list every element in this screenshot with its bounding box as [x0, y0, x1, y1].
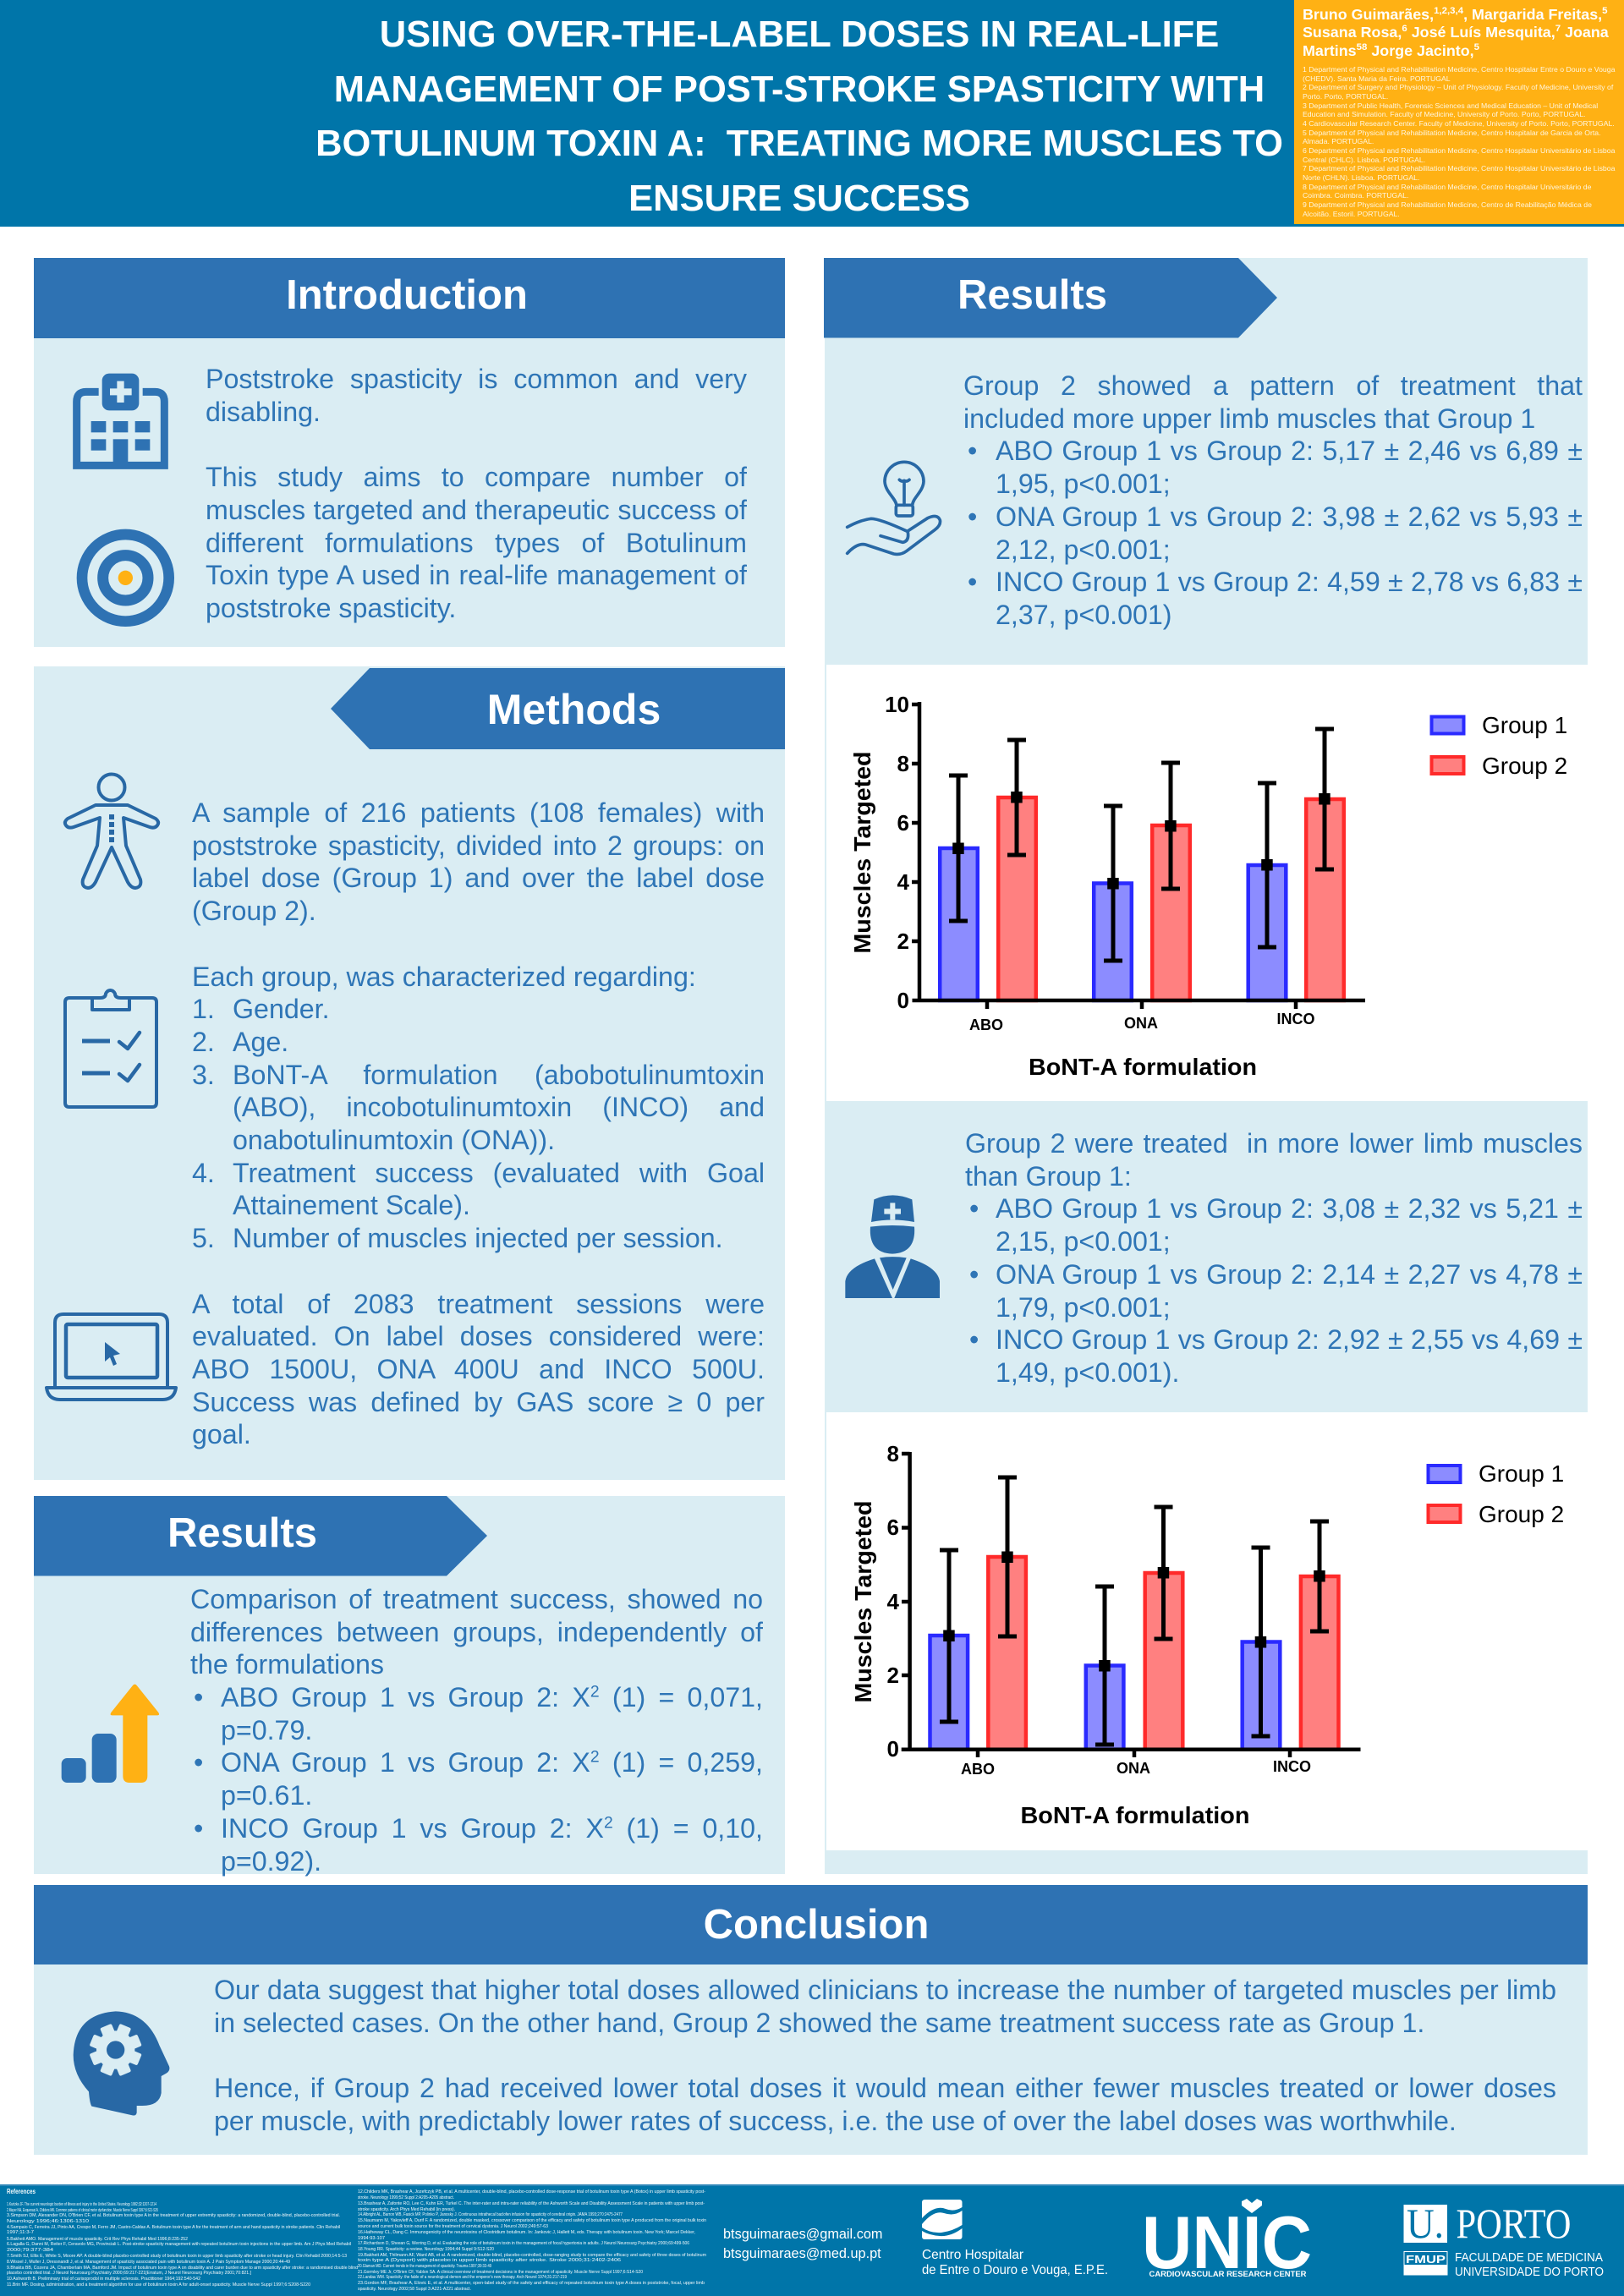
methods text: Each group, was characterized regarding:: [192, 961, 696, 991]
references: 1997;11:3-7: [7, 2230, 34, 2235]
legend: Group 2: [1479, 1501, 1564, 1527]
icon: hospital: [73, 374, 168, 469]
icon: hand with light bulb: [846, 460, 942, 556]
references: 10.Ashworth B. Preliminary trial of carisoprodol in multiple sclerosis. Practitioner 1964;192:540-542: [7, 2277, 200, 2282]
references: [7, 2188, 706, 2292]
logo: Centro Hospitalar: [922, 2200, 1108, 2277]
methods text: Gender.: [233, 994, 330, 1024]
results left text: [190, 1584, 763, 1876]
logo: U.Porto FMUP: PORTO: [1457, 2200, 1572, 2247]
references: 12.Childers MK, Brashear A, Jozefczyk PB, et al. A multicenter, double-blind, placebo-controlled dose-response trial of botulinum toxin type A (Botox) in upper limb spasticity post-: [358, 2189, 705, 2195]
methods text: A sample of 216 patients (108 females) with: [192, 797, 765, 828]
results right text: lower limb: [965, 1128, 1583, 1388]
results right text: upper limb: 2,37, p<0.001): [996, 600, 1172, 630]
results right text: lower limb: •: [969, 1324, 979, 1355]
results left text: •: [194, 1747, 203, 1778]
results right text: upper limb: 2,12, p<0.001;: [996, 534, 1171, 565]
affiliations: 3 Department of Public Health, Forensic Sciences and Medical Education – Unit of Medical: [1303, 101, 1598, 110]
introduction text: different formulations types of Botulinum: [206, 528, 747, 558]
heading: methods arrow: Methods: [487, 686, 661, 733]
results right text: lower limb: than Group 1:: [965, 1161, 1132, 1192]
references: 9.Bhakta BB, Cozens JA, Chamberlain MA, Bamford JM. Impact of botulinum toxin type A on disability and carer burden due to arm spasticity after stroke: a randomised double blind: [7, 2266, 358, 2271]
introduction text: [206, 364, 747, 623]
affiliations: 6 Department of Physical and Rehabilitation Medicine, Centro Hospitalar Universitário de Lisboa: [1303, 146, 1615, 155]
x axis labels: ABO: [969, 1016, 1003, 1033]
heading: conclusion: Conclusion: [704, 1902, 929, 1948]
results right text: lower limb: ABO Group 1 vs Group 2: 3,08 ± 2,32 vs 5,21 ±: [996, 1193, 1583, 1224]
affiliations: 4 Cardiovascular Research Center. Faculty of Medicine, University of Porto. Porto, PORTUGAL.: [1303, 119, 1615, 128]
references: stroke spasticity. Arch Phys Med Rehabil (in press).: [358, 2207, 455, 2212]
methods text: label dose (Group 1) and over the label dose: [192, 863, 765, 893]
authors: Martins58 Jorge Jacinto,5: [1303, 42, 1479, 59]
y axis labels: 6: [887, 1515, 899, 1540]
axes: [902, 1452, 1360, 1757]
heading: results left arrow: [34, 1496, 487, 1576]
affiliations: Coimbra. Coimbra. PORTUGAL.: [1303, 191, 1408, 200]
y axis labels: [887, 1441, 900, 1762]
methods text: [192, 797, 765, 1449]
icon: laptop with cursor: [45, 1312, 178, 1401]
methods text: BoNT-A formulation (abobotulinumtoxin: [233, 1060, 765, 1090]
conclusion text: per muscle, with predictably lower rates of success, i.e. the use of over the label doses was worthwhile.: [214, 2106, 1457, 2136]
panel: introduction: [34, 258, 785, 647]
references: Neurology 1996;46:1306-1310: [7, 2219, 89, 2224]
contact emails: btsguimaraes@med.up.pt: [723, 2246, 881, 2261]
x axis labels: ONA: [1124, 1015, 1158, 1032]
references: 23.Gordon MF, Brashear A, Elovic E, et al. A multicenter, open-label study of the safety and efficacy of repeated botulinum toxin type A doses in poststroke, focal, upper limb: [358, 2281, 705, 2286]
references: 22.Landau WM. Spasticity: the fable of a neurological demon and the emperor's new therapy. Arch Neurol 1974;31:217-219: [358, 2275, 567, 2280]
introduction text: Toxin type A used in real-life management of: [206, 560, 747, 590]
affiliations: Norte (CHLN). Lisboa. PORTUGAL.: [1303, 173, 1419, 182]
panel: conclusion: [34, 1885, 1588, 2155]
references: spasticity. Neurology 2002;58 Suppl 3:A221-A221 abstract.: [358, 2287, 471, 2292]
methods text: evaluated. On label doses considered were:: [192, 1321, 765, 1351]
results right text: lower limb: INCO Group 1 vs Group 2: 2,92 ± 2,55 vs 4,69 ±: [996, 1324, 1583, 1355]
references: 7.Smith SJ, Ellis E, White S, Moore AP. A double-blind placebo-controlled study of botulinum toxin in upper limb spasticity after stroke or head injury. Clin Rehabil 2000;14:5-13: [7, 2254, 347, 2259]
affiliations: (CHEDV). Santa Maria da Feira. PORTUGAL: [1303, 74, 1451, 83]
results left text: differences between groups, independently of: [190, 1617, 763, 1647]
icon: target: [76, 529, 174, 627]
references: 21.Gormley ME Jr, O'Brien CF, Yablon SA. A clinical overview of treatment decisions in the management of spasticity. Muscle Nerve Suppl 1997;6:S14-S20: [358, 2270, 643, 2275]
logo: UNIC: UNIC: [1142, 2200, 1312, 2284]
legend: Group 1: [1482, 712, 1567, 738]
results left text: the formulations: [190, 1649, 384, 1680]
affiliations: 2 Department of Surgery and Physiology – Unit of Physiology. Faculty of Medicine, University of: [1303, 83, 1613, 91]
y axis title: Muscles Targeted: [849, 751, 875, 954]
icon: head with gear: [73, 2011, 169, 2116]
affiliations: 9 Department of Physical and Rehabilitation Medicine, Centro de Reabilitação Médica de: [1303, 200, 1592, 209]
logo: U.Porto FMUP: FMUP: [1406, 2253, 1446, 2266]
references: 4.Sampaio C, Ferreira JJ, Pinto AA, Crespo M, Ferro JM, Castro-Caldas A. Botulinum toxin type A for the treatment of arm and hand spasticity in stroke patients. Clin Rehabil: [7, 2225, 340, 2230]
heading: introduction: Introduction: [286, 272, 528, 318]
methods text: 4.: [192, 1158, 215, 1188]
methods text: Attainement Scale).: [233, 1190, 470, 1220]
authors: Susana Rosa,6 José Luís Mesquita,7 Joana: [1303, 24, 1609, 41]
results left text: INCO Group 1 vs Group 2: X2 (1) = 0,10,: [221, 1813, 763, 1844]
affiliations: 8 Department of Physical and Rehabilitation Medicine, Centro Hospitalar Universitário de: [1303, 183, 1591, 191]
y axis labels: 2: [897, 929, 909, 954]
footer band: [0, 2184, 1624, 2296]
results right text: lower limb: 1,49, p<0.001).: [996, 1357, 1179, 1388]
x axis labels: ONA: [1116, 1760, 1150, 1777]
references: 17.Richardson D, Sheean G, Werring D, et al. Evaluating the role of botulinum toxin in the management of focal hypertonia in adults. J Neurol Neurosurg Psychiatry 2000;69:499-506: [358, 2241, 689, 2246]
poster title: USING OVER-THE-LABEL DOSES IN REAL-LIFE MANAGEMENT OF POST-STROKE SPASTICITY WITH BOTULINUM TOXIN A: TREATING MORE MUSCLES TO ENSURE SUCCESS: [315, 14, 1283, 219]
icon: doctor: [845, 1195, 940, 1298]
icon: human body: [63, 773, 161, 890]
references: 1.Kurtzke JF. The current neurologic burden of illness and injury in the United States. Neurology 1982;32:1207-1214: [7, 2202, 156, 2207]
introduction text: This study aims to compare number of: [206, 462, 747, 492]
results right text: lower limb: •: [969, 1193, 979, 1224]
y axis labels: 10: [885, 692, 909, 717]
x axis labels: INCO: [1273, 1758, 1311, 1775]
references: source and current bulk toxin source for the treatment of cervical dystonia. J Neurol 2002;249:57-63: [358, 2224, 548, 2229]
introduction text: muscles targeted and therapeutic success of: [206, 495, 747, 525]
references: 13.Brashear A, Zafonte RO, Lee C, Kuhn ER, Turkel C. The inter-rater and intra-rater reliability of the Ashworth Scale and Disability Assessment Scale in patients with upper limb post-: [358, 2201, 705, 2206]
conclusion text: Our data suggest that higher total doses allowed clinicians to increase the number of targeted muscles per limb: [214, 1975, 1556, 2005]
bar chart: lower limb muscles targeted: [826, 1412, 1588, 1850]
results right text: upper limb: •: [968, 501, 977, 532]
affiliations: Central (CHLC). Lisboa. PORTUGAL.: [1303, 156, 1425, 164]
results left text: •: [194, 1682, 203, 1712]
methods text: 1.: [192, 994, 215, 1024]
results right text: lower limb: •: [969, 1259, 979, 1290]
contact emails: [723, 2227, 882, 2261]
affiliations: [1303, 65, 1616, 218]
results left text: p=0.92).: [221, 1845, 321, 1876]
icon: rising bars with arrow: [61, 1685, 159, 1783]
references: 3.Simpson DM, Alexander DN, O'Brien CF, et al. Botulinum toxin type A in the treatment of upper extremity spasticity: a randomized, double-blind, placebo-controlled trial.: [7, 2213, 340, 2218]
x axis labels: ABO: [961, 1761, 995, 1778]
header banner: [0, 0, 1624, 227]
bar chart: upper limb muscles targeted: [826, 665, 1588, 1101]
affiliations: Education and Simulation. Faculty of Medicine, University of Porto. Porto, PORTUGAL.: [1303, 110, 1585, 118]
axes: [912, 702, 1365, 1009]
references: 8.Wissel J, Muller J, Dressnandt J, et al. Management of spasticity associated pain with botulinum toxin A. J Pain Symptom Manage 2000;20:44-49: [7, 2260, 290, 2265]
affiliations: 1 Department of Physical and Rehabilitation Medicine, Centro Hospitalar Entre o Douro e Vouga: [1303, 65, 1615, 74]
y axis labels: 6: [897, 810, 909, 836]
bars: [940, 797, 1344, 1000]
references: 19.Bakheit AM, Thilmann AF, Ward AB, et al. A randomized, double-blind, placebo-controlled, dose-ranging study to compare the efficacy and safety of three doses of botulinum: [358, 2253, 706, 2258]
references: placebo controlled trial. J Neurol Neurosurg Psychiatry 2000;69:217-221[Erratum, J Neurol Neurosurg Psychiatry 2001;70:821.]: [7, 2271, 251, 2276]
heading: results right arrow: [824, 258, 1277, 338]
error bars: [940, 1477, 1329, 1745]
results left text: ABO Group 1 vs Group 2: X2 (1) = 0,071,: [221, 1682, 763, 1712]
heading: results right arrow: Results: [957, 272, 1107, 318]
results right text: upper limb: ABO Group 1 vs Group 2: 5,17 ± 2,46 vs 6,89 ±: [996, 436, 1583, 466]
methods text: Number of muscles injected per session.: [233, 1223, 723, 1253]
references: 15.Naumann M, Yakovleff A, Durif F. A randomized, double masked, crossover comparison of the efficacy and safety of botulinum toxin type A produced from the original bulk toxin: [358, 2218, 706, 2223]
results right text: upper limb: •: [968, 567, 977, 597]
affiliations: Almada. PORTUGAL.: [1303, 137, 1374, 145]
references: 1994:93-107: [358, 2236, 385, 2241]
results left text: •: [194, 1813, 203, 1844]
results right text: lower limb: Group 2 were treated in more lower limb muscles: [965, 1128, 1583, 1159]
y axis labels: 0: [887, 1736, 899, 1762]
results right text: lower limb: 2,15, p<0.001;: [996, 1226, 1171, 1257]
legend: [1431, 712, 1567, 779]
references: 6.Lagalla G, Danni M, Reiter F, Ceravolo MG, Provinciali L. Post-stroke spasticity management with repeated botulinum toxin injections in the upper limb. Am J Phys Med Rehabil: [7, 2242, 351, 2247]
legend: [1428, 1460, 1564, 1527]
results right text: lower limb: ONA Group 1 vs Group 2: 2,14 ± 2,27 vs 4,78 ±: [996, 1259, 1583, 1290]
conclusion text: [214, 1975, 1556, 2136]
methods text: Age.: [233, 1027, 288, 1057]
methods text: Treatment success (evaluated with Goal: [233, 1158, 765, 1188]
logo: U.Porto FMUP: FACULDADE DE MEDICINA: [1455, 2250, 1603, 2265]
references: 16.Hatheway CL, Dang C. Immunogenicity of the neurotoxins of Clostridium botulinum. In: Jankovic J, Hallett M, eds. Therapy with botulinum toxin. New York; Marcel Dekker,: [358, 2230, 695, 2235]
methods text: 3.: [192, 1060, 215, 1090]
x axis labels: INCO: [1277, 1011, 1314, 1027]
affiliations: 7 Department of Physical and Rehabilitation Medicine, Centro Hospitalar Universitário de Lisboa: [1303, 164, 1615, 173]
introduction text: Poststroke spasticity is common and very: [206, 364, 747, 394]
results right text: upper limb: included more upper limb muscles that Group 1: [963, 403, 1535, 434]
results right text: upper limb: •: [968, 436, 977, 466]
introduction text: disabling.: [206, 397, 321, 427]
logo: U.Porto FMUP: UNIVERSIDADE DO PORTO: [1455, 2265, 1604, 2279]
results right text: upper limb: ONA Group 1 vs Group 2: 3,98 ± 2,62 vs 5,93 ±: [996, 501, 1583, 532]
heading: methods arrow: [331, 668, 785, 749]
y axis labels: 4: [887, 1589, 900, 1614]
references: 2.Mayer NH, Esquenazi A, Childers MK. Common patterns of clinical motor dysfunction. Muscle Nerve Suppl 1997;6:S21-S35: [7, 2208, 158, 2213]
conclusion text: in selected cases. On the other hand, Group 2 showed the same treatment success rate as Group 1.: [214, 2008, 1424, 2038]
affiliations: 5 Department of Physical and Rehabilitation Medicine, Centro Hospitalar de Garcia de Orta.: [1303, 129, 1601, 137]
results right text: lower limb: 1,79, p<0.001;: [996, 1292, 1171, 1323]
authors: Bruno Guimarães,1,2,3,4, Margarida Freitas,5: [1303, 6, 1608, 23]
authors: [1303, 6, 1609, 59]
references: 5.Bakheit AMO. Management of muscle spasticity. Crit Rev Phys Rehabil Med 1996;8:235-252: [7, 2237, 188, 2242]
results right text: upper limb: Group 2 showed a pattern of treatment that: [963, 370, 1583, 401]
logo: Centro Hospitalar: de Entre o Douro e Vouga, E.P.E.: [922, 2263, 1108, 2277]
methods text: 5.: [192, 1223, 215, 1253]
y axis labels: 4: [897, 869, 910, 895]
references: References: [7, 2188, 36, 2195]
methods text: (ABO), incobotulinumtoxin (INCO) and: [233, 1092, 765, 1122]
y axis labels: [885, 692, 910, 1013]
methods text: 2.: [192, 1027, 215, 1057]
methods text: (Group 2).: [192, 896, 316, 926]
results left text: p=0.79.: [221, 1715, 312, 1745]
references: 2000;79:377-384: [7, 2248, 53, 2253]
results left text: p=0.61.: [221, 1780, 312, 1811]
y axis labels: 8: [897, 751, 909, 776]
results right text: upper limb: [963, 370, 1583, 630]
icon: clipboard checklist: [63, 989, 158, 1109]
methods text: poststroke spasticity, divided into 2 groups: on: [192, 830, 765, 861]
heading: introduction: [34, 258, 785, 338]
error bars: [949, 729, 1334, 961]
logo: UNIC: CARDIOVASCULAR RESEARCH CENTER: [1149, 2270, 1307, 2279]
references: 11.Brin MF. Dosing, administration, and a treatment algorithm for use of botulinum toxin A for adult-onset spasticity. Muscle Nerve Suppl 1997;6:S208-S220: [7, 2282, 310, 2288]
methods text: goal.: [192, 1419, 251, 1449]
y axis title: Muscles Targeted: [850, 1500, 876, 1703]
panel: results right: [825, 258, 1588, 1874]
heading: conclusion: [34, 1885, 1588, 1964]
references: 14.Albright AL, Barron WB, Fasick MP, Polinko P, Janosky J. Continuous intrathecal baclofen infusion for spasticity of cerebral origin. JAMA 1993;270:2475-2477: [358, 2212, 623, 2217]
bars: [930, 1557, 1338, 1750]
logo: U.Porto FMUP: [1404, 2200, 1604, 2279]
references: 18.Young RR. Spasticity: a review. Neurology 1994;44 Suppl 9:S12-S20: [358, 2247, 494, 2252]
legend: Group 1: [1479, 1460, 1564, 1487]
x axis labels: [961, 1758, 1311, 1778]
heading: results left arrow: Results: [167, 1510, 317, 1556]
results left text: Comparison of treatment success, showed no: [190, 1584, 763, 1614]
affiliations: Porto. Porto, PORTUGAL.: [1303, 92, 1388, 101]
y axis labels: 8: [887, 1441, 899, 1466]
methods text: A total of 2083 treatment sessions were: [192, 1289, 765, 1319]
logo: U.Porto FMUP: U.: [1407, 2200, 1444, 2247]
logo: Centro Hospitalar: Centro Hospitalar: [922, 2248, 1024, 2262]
methods text: onabotulinumtoxin (ONA)).: [233, 1125, 555, 1155]
results right text: upper limb: INCO Group 1 vs Group 2: 4,59 ± 2,78 vs 6,83 ±: [996, 567, 1583, 597]
y axis labels: 0: [897, 988, 909, 1013]
authors and affiliations box: [1294, 0, 1624, 224]
methods text: ABO 1500U, ONA 400U and INCO 500U.: [192, 1354, 765, 1384]
y axis labels: 2: [887, 1663, 899, 1688]
panel: methods: [34, 666, 785, 1480]
x axis title: BoNT-A formulation: [1020, 1802, 1250, 1828]
introduction text: poststroke spasticity.: [206, 593, 456, 623]
affiliations: Alcoitão. Estoril. PORTUGAL.: [1303, 210, 1400, 218]
legend: Group 2: [1482, 753, 1567, 779]
results left text: ONA Group 1 vs Group 2: X2 (1) = 0,259,: [221, 1747, 763, 1778]
x axis title: BoNT-A formulation: [1029, 1054, 1257, 1080]
references: toxin type A (Dysport) with placebo in upper limb spasticity after stroke. Stroke 2000;31:2402-2406: [358, 2258, 621, 2263]
methods text: Success was defined by GAS score ≥ 0 per: [192, 1387, 765, 1417]
contact emails: btsguimaraes@gmail.com: [723, 2227, 882, 2242]
x axis labels: [969, 1011, 1314, 1033]
conclusion text: Hence, if Group 2 had received lower total doses it would mean either fewer muscles treated or lower doses: [214, 2073, 1556, 2103]
results right text: upper limb: 1,95, p<0.001;: [996, 469, 1171, 499]
references: stroke. Neurology 1999;52 Suppl 2:A205-A205 abstract.: [358, 2195, 454, 2200]
references: 20.Glaman MD. Current trends in the management of spasticity. Trauma 1997;39:33-49: [358, 2264, 491, 2269]
panel: results left: [34, 1496, 785, 1874]
